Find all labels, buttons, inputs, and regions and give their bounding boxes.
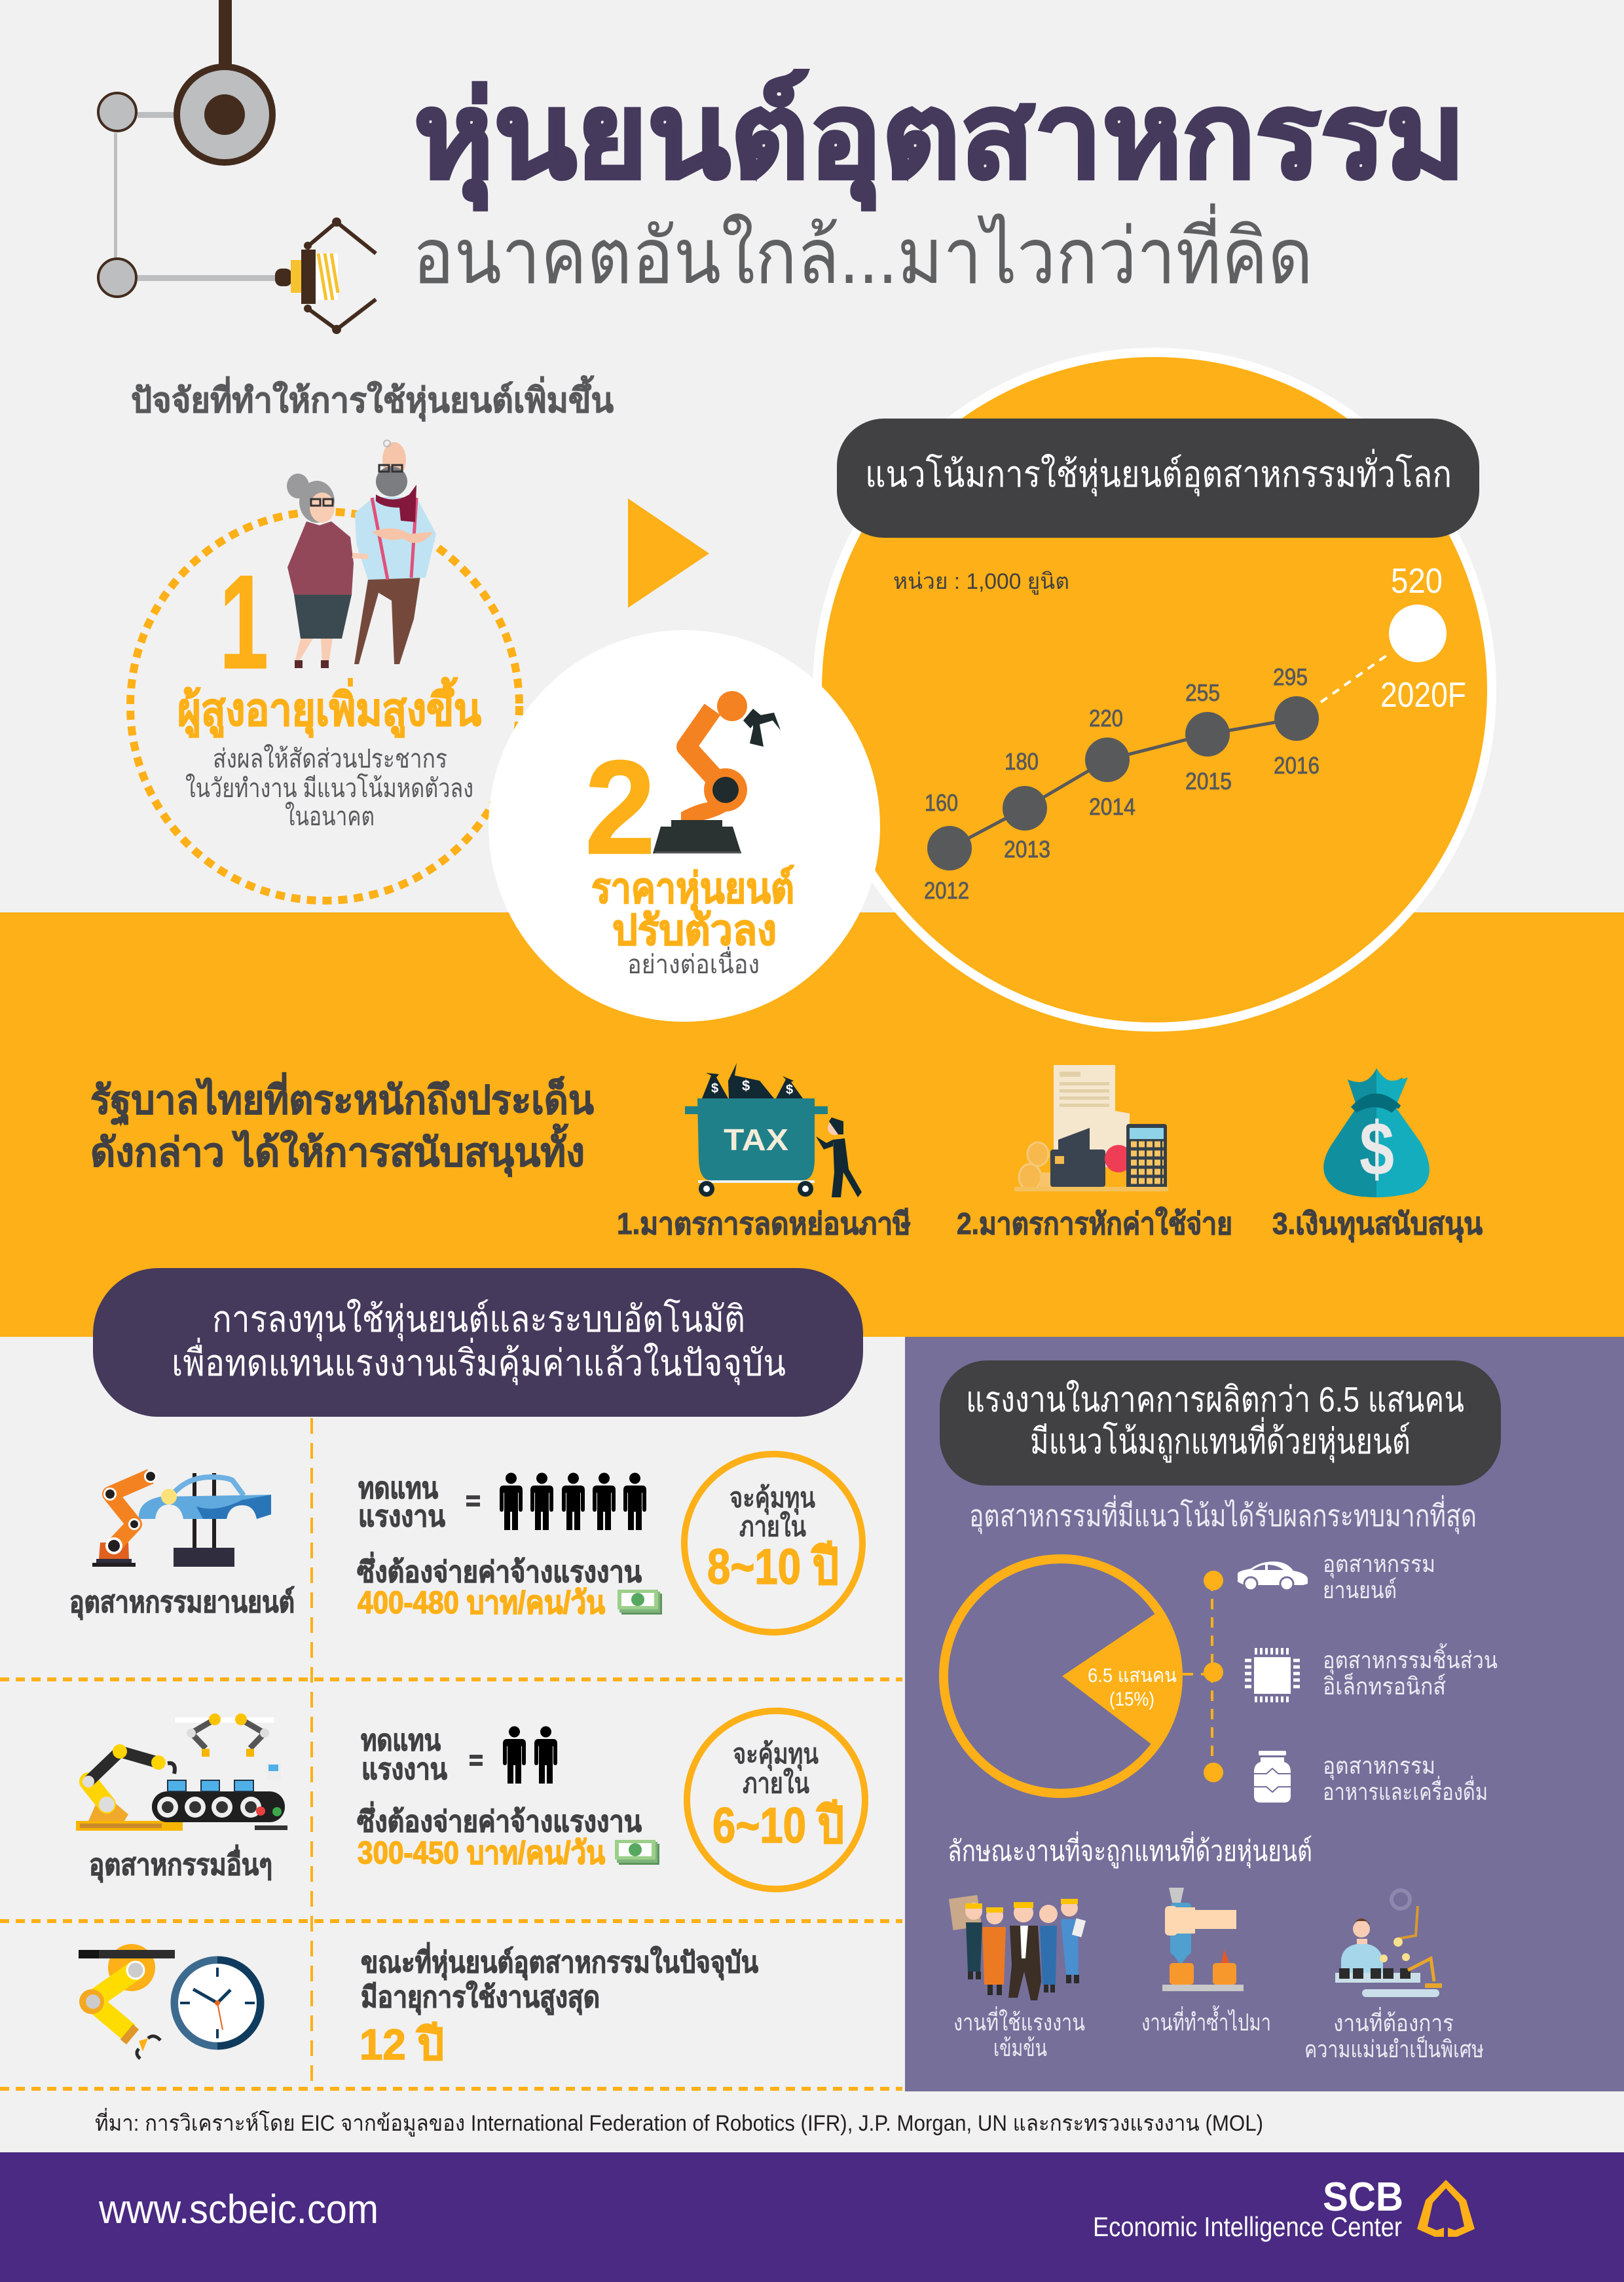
factor 1 body text: [185, 743, 473, 831]
industry connector timeline: [1183, 1571, 1223, 1782]
replacement text: [358, 1472, 480, 1533]
lifespan text: มีอายุการใช้งานสูงสุด: [361, 1980, 600, 2015]
line chart: 2012: [924, 877, 969, 904]
investment heading pill: เพื่อทดแทนแรงงานเริ่มคุ้มค่าแล้วในปัจจุบัน: [172, 1337, 786, 1385]
icon: conveyor robots: [76, 1713, 287, 1831]
title: หุ่นยนต์อุตสาหกรรม: [414, 69, 1466, 210]
footer: Economic Intelligence Center: [1093, 2211, 1402, 2242]
section heading: factors: ปัจจัยที่ทำให้การใช้หุ่นยนต์เพิ่มขึ้น: [131, 375, 614, 422]
icon: cash: [615, 1840, 659, 1865]
icon: repetitive work hand: [1162, 1888, 1244, 1991]
unit label: หน่วย : 1,000 ยูนิต: [893, 569, 1069, 595]
logo mark: [1417, 2180, 1475, 2237]
orange band background: [0, 912, 1624, 1337]
label: อุตสาหกรรมยานยนต์: [69, 1586, 295, 1620]
government support heading: [90, 1072, 594, 1177]
icon: elderly couple: [287, 440, 436, 668]
lifespan text: [360, 1942, 758, 2068]
factor 2 white circle: [489, 630, 880, 1022]
job type labels: เข้มข้น: [993, 2034, 1047, 2061]
factor 1 number: 1: [219, 548, 268, 697]
wage text: ซึ่งต้องจ่ายค่าจ้างแรงงาน: [357, 1552, 642, 1588]
arrow: [628, 498, 709, 608]
replacement text: ทดแทน: [358, 1472, 438, 1505]
icon: tax bin: [685, 1063, 862, 1197]
factor 1 body text: ในวัยทำงาน มีแนวโน้มหดตัวลง: [185, 773, 473, 803]
support measures labels: 2.มาตรการหักค่าใช้จ่าย: [957, 1206, 1232, 1241]
icon: tax bin: TAX: [724, 1123, 788, 1157]
icon: tax bin: $: [711, 1081, 718, 1096]
line chart: 295: [1273, 664, 1308, 690]
industry labels: อาหารและเครื่องดื่ม: [1323, 1776, 1488, 1805]
icon: yellow robot arm: [79, 1944, 175, 2059]
payback circle: ภายใน: [743, 1767, 809, 1799]
icon: labour workers group: [949, 1895, 1086, 2000]
line chart: 2014: [1089, 793, 1135, 820]
trend heading pill: แนวโน้มการใช้หุ่นยนต์อุตสาหกรรมทั่วโลก: [865, 449, 1452, 496]
line chart: 2015: [1185, 768, 1232, 795]
line chart: 2013: [1004, 836, 1050, 863]
payback circle: 8~10 ปี: [707, 1539, 839, 1595]
pie chart: (15%): [1109, 1689, 1154, 1710]
factor 2 body: อย่างต่อเนื่อง: [627, 946, 760, 979]
icon: money bag: [1323, 1068, 1430, 1197]
label: อุตสาหกรรมอื่นๆ: [89, 1844, 272, 1883]
replacement text: ทดแทน: [361, 1725, 441, 1757]
icon: five workers: [500, 1472, 646, 1530]
payback circle: จะคุ้มทุน: [729, 1482, 815, 1515]
line chart: 255: [1185, 679, 1220, 706]
industry labels: อุตสาหกรรม: [1323, 1550, 1435, 1579]
icon: chip: [1245, 1648, 1300, 1702]
subtitle: อนาคตอันใกล้...มาไวกว่าที่คิด: [413, 203, 1313, 300]
wage text: ซึ่งต้องจ่ายค่าจ้างแรงงาน: [357, 1801, 642, 1838]
pie chart: [944, 1559, 1178, 1793]
icon: tax bin: $: [786, 1083, 793, 1097]
labour heading pill: แรงงานในภาคการผลิตกว่า 6.5 แสนคน: [966, 1379, 1464, 1419]
icon: bottle: [1254, 1751, 1291, 1803]
panel: world trend circle: [817, 352, 1492, 1027]
industry labels: [1323, 1550, 1498, 1805]
icon: receipt and calculator: [1014, 1065, 1168, 1191]
factor 2 heading: ราคาหุ่นยนต์: [591, 865, 794, 914]
pie chart: 6.5 แสนคน: [1088, 1665, 1177, 1687]
labour heading pill: มีแนวโน้มถูกแทนที่ด้วยหุ่นยนต์: [1030, 1417, 1411, 1463]
icon: clock: [170, 1956, 265, 2050]
support measures labels: [617, 1206, 1483, 1243]
row 3: robot lifespan: [79, 1942, 758, 2068]
line chart: [924, 561, 1466, 904]
icon: two workers: [503, 1727, 557, 1784]
row 2: other industries: 300-450 บาท/คน/วัน: [358, 1836, 605, 1871]
footer: [0, 2152, 1624, 2282]
row 1: automotive: 400-480 บาท/คน/วัน: [358, 1586, 605, 1620]
investment heading pill: [93, 1268, 863, 1417]
icon: precision worker: [1335, 1890, 1442, 1997]
job type labels: [953, 2005, 1484, 2063]
row divider lines: [0, 1418, 902, 2089]
industry labels: ยานยนต์: [1323, 1577, 1397, 1603]
icon: orange robot: [653, 691, 781, 853]
lifespan text: 12 ปี: [360, 2020, 444, 2068]
factor 2 number: 2: [585, 733, 655, 882]
source note: ที่มา: การวิเคราะห์โดย EIC จากข้อมูลของ International Federation of Robotics (IFR), J.P. Morgan, UN และกระทรวงแรงงาน (MOL): [95, 2108, 1263, 2137]
factor 2 white circle: ปรับตัวลง: [612, 907, 777, 954]
payback circle: จะคุ้มทุน: [733, 1738, 819, 1771]
replacement text: [361, 1725, 483, 1786]
lifespan text: ขณะที่หุ่นยนต์อุตสาหกรรมในปัจจุบัน: [361, 1942, 758, 1981]
investment heading pill: การลงทุนใช้หุ่นยนต์และระบบอัตโนมัติ: [212, 1298, 745, 1341]
line chart: 2016: [1274, 752, 1320, 779]
logo text: SCB: [1323, 2175, 1403, 2220]
industry labels: อิเล็กทรอนิกส์: [1323, 1672, 1446, 1700]
job type labels: งานที่ทำซ้ำไปมา: [1141, 2005, 1271, 2036]
job type labels: งานที่ใช้แรงงาน: [953, 2006, 1085, 2036]
line chart: 180: [1005, 748, 1039, 775]
trend heading pill: [837, 419, 1479, 538]
factor 1 body text: ส่งผลให้สัดส่วนประชากร: [213, 743, 447, 774]
government support heading: ดังกล่าว ได้ให้การสนับสนุนทั้ง: [90, 1123, 585, 1177]
affected industries heading: อุตสาหกรรมที่มีแนวโน้มได้รับผลกระทบมากที่สุด: [969, 1495, 1477, 1535]
icon: money bag: $: [1359, 1106, 1394, 1191]
factor 1 heading: ผู้สูงอายุเพิ่มสูงขึ้น: [177, 677, 481, 738]
job types heading: ลักษณะงานที่จะถูกแทนที่ด้วยหุ่นยนต์: [948, 1831, 1312, 1869]
icon: tax bin: $: [742, 1077, 750, 1094]
factor 1 body text: ในอนาคต: [285, 801, 375, 831]
labour heading pill: [940, 1360, 1501, 1486]
icon: car: [1238, 1562, 1308, 1590]
factor 1 dashed circle: [130, 512, 519, 901]
industry labels: อุตสาหกรรมชิ้นส่วน: [1323, 1643, 1498, 1675]
job type labels: ความแม่นยำเป็นพิเศษ: [1304, 2034, 1484, 2063]
row 1: automotive: [69, 1454, 862, 1632]
line chart: 220: [1089, 705, 1123, 732]
line chart: 160: [925, 789, 958, 816]
payback circle: [687, 1711, 865, 1889]
replacement text: แรงงาน: [361, 1753, 447, 1786]
payback circle: 6~10 ปี: [712, 1798, 844, 1854]
support measures labels: 3.เงินทุนสนับสนุน: [1272, 1206, 1483, 1243]
row 2: other industries: [76, 1711, 865, 1889]
icon: cash: [618, 1590, 662, 1615]
line chart: 520: [1391, 561, 1443, 601]
line chart: 2020F: [1380, 675, 1466, 715]
payback circle: ภายใน: [739, 1510, 806, 1542]
replacement text: แรงงาน: [358, 1501, 445, 1533]
support measures labels: 1.มาตรการลดหย่อนภาษี: [617, 1206, 911, 1241]
payback circle: [684, 1454, 862, 1632]
job type labels: งานที่ต้องการ: [1333, 2007, 1454, 2036]
panel: labour section right: [905, 1337, 1624, 2091]
decorative robot arm header icon: [98, 0, 376, 334]
icon: car welding robot: [92, 1470, 271, 1567]
website: www.scbeic.com: [98, 2187, 378, 2232]
industry labels: อุตสาหกรรม: [1323, 1752, 1435, 1780]
government support heading: รัฐบาลไทยที่ตระหนักถึงประเด็น: [90, 1072, 594, 1125]
